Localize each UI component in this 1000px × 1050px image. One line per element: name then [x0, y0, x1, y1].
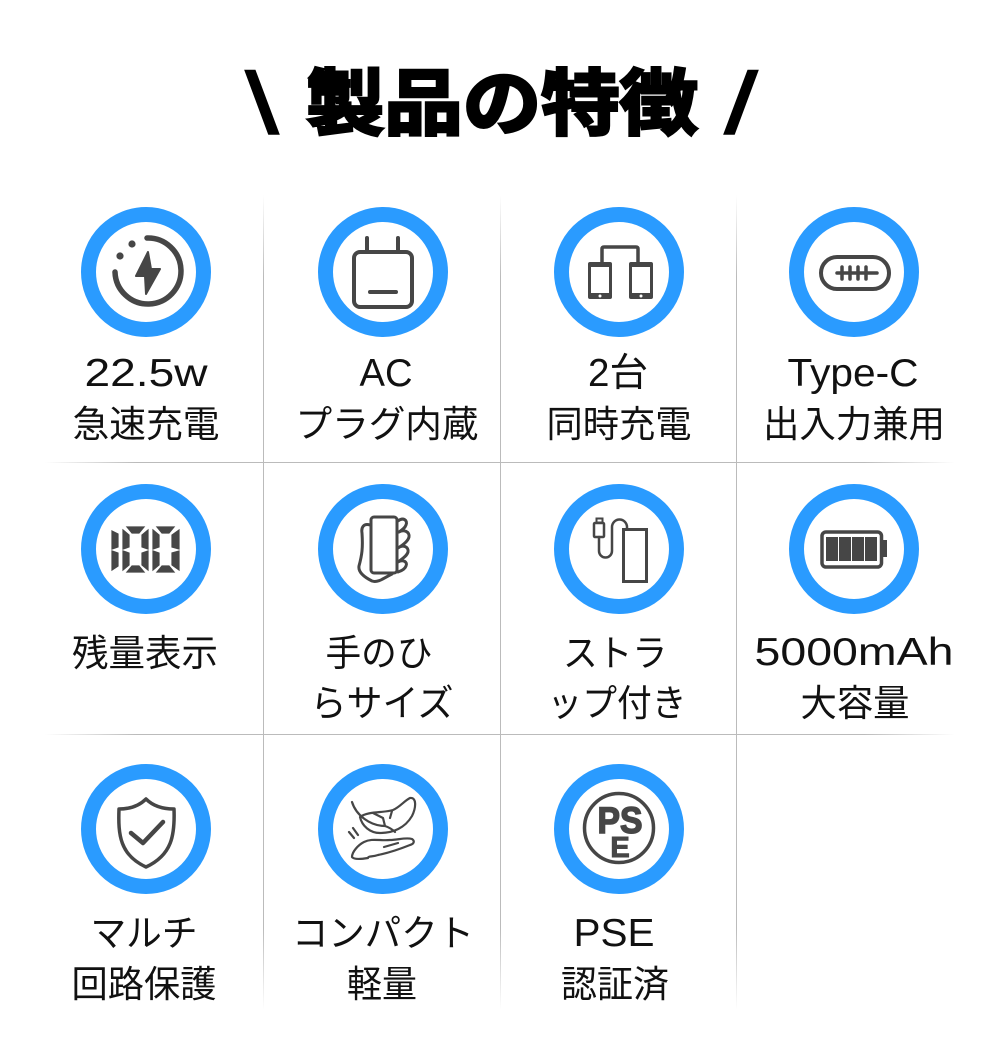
- feature: multi protection circuit: マルチ: [90, 913, 198, 954]
- feature: 2 devices: 2台: [588, 352, 648, 395]
- feature: compact and light: [292, 772, 474, 1005]
- feature: strap: ップ付き: [548, 683, 686, 724]
- title: [246, 56, 758, 152]
- feature: remaining charge display: 残量表示: [72, 633, 218, 674]
- icon: battery: [822, 532, 887, 567]
- feature: AC plug: プラグ内蔵: [296, 404, 478, 445]
- feature: strap: ストラ: [563, 633, 667, 674]
- icon: hand holding phone: [359, 517, 409, 581]
- feature: Type-C: Type-C: [788, 352, 918, 395]
- feature: 2 devices: 同時充電: [546, 404, 692, 445]
- feature: Type-C: 出入力兼用: [763, 404, 945, 445]
- feature: 2 devices: [546, 214, 692, 445]
- feature: compact and light: コンパクト: [292, 913, 474, 954]
- feature: 5000mAh capacity: [754, 492, 954, 724]
- feature: AC plug: AC: [360, 352, 412, 395]
- feature: palm size: 手のひ: [326, 633, 432, 674]
- icon: shield with check: [119, 799, 174, 867]
- icon: power bank with strap cable: [594, 518, 646, 582]
- icon: 100 digital display: [112, 527, 179, 572]
- title: /: [724, 56, 758, 152]
- feature: palm size: [310, 492, 454, 724]
- feature: 22.5w fast charging: 22.5w: [84, 352, 208, 395]
- feature: Type-C: [763, 214, 945, 445]
- icon: two phones: [588, 247, 653, 299]
- feature: PSE certified: 認証済: [561, 964, 669, 1005]
- feature: remaining charge display: [72, 492, 218, 674]
- feature: 22.5w fast charging: [72, 214, 220, 445]
- feature: 5000mAh capacity: 大容量: [800, 683, 910, 724]
- icon: feather over hand: [349, 798, 415, 859]
- feature: multi protection circuit: 回路保護: [72, 964, 216, 1005]
- feature: AC plug: [296, 214, 478, 445]
- icon: USB-C port: [821, 257, 889, 289]
- icon: PSE mark: PS: [598, 800, 642, 841]
- icon: PSE mark: E: [610, 832, 630, 864]
- icon: charging bolt: [115, 238, 181, 304]
- feature: strap: [548, 492, 686, 724]
- feature: PSE certified: [561, 772, 676, 1005]
- feature: compact and light: 軽量: [347, 964, 417, 1005]
- feature: multi protection circuit: [72, 772, 216, 1005]
- feature: palm size: らサイズ: [310, 683, 454, 724]
- icon: PSE mark: [584, 794, 654, 864]
- feature: 22.5w fast charging: 急速充電: [72, 404, 220, 445]
- title: \: [246, 56, 279, 152]
- icon: plug: [354, 238, 412, 307]
- feature: PSE certified: PSE: [574, 912, 654, 955]
- title: 製品の特徴: [306, 65, 698, 145]
- feature: 5000mAh capacity: 5000mAh: [754, 631, 954, 674]
